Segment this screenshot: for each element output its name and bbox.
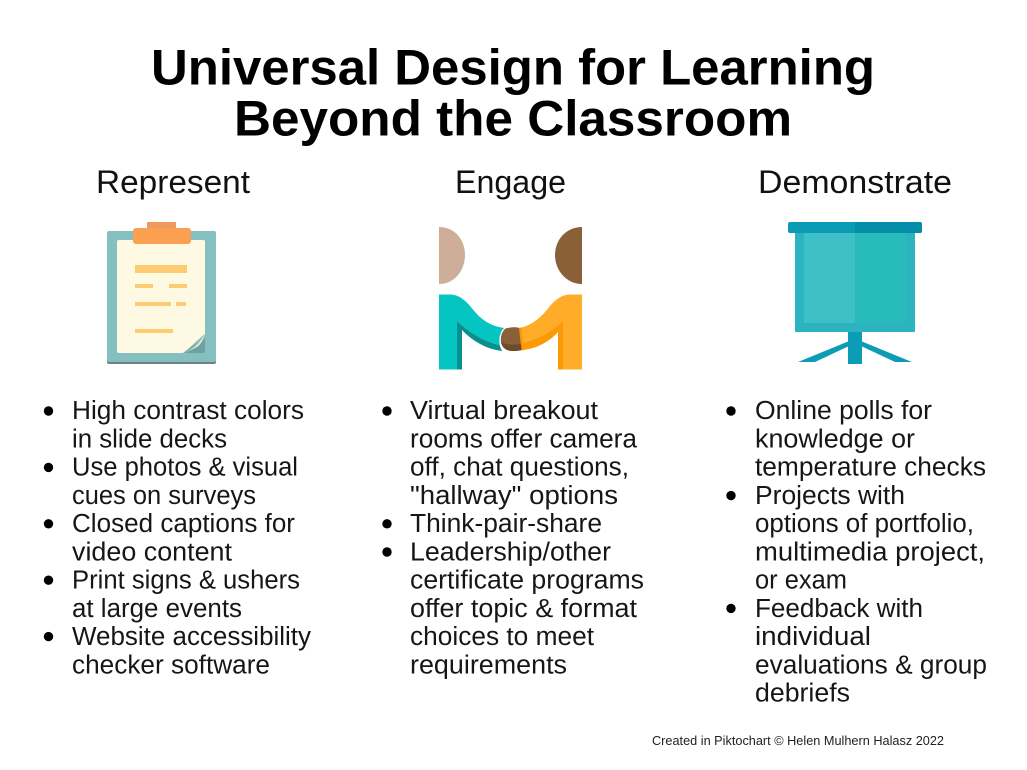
title: Beyond the Classroom xyxy=(234,90,792,146)
list: Demonstrate: knowledge or xyxy=(755,425,916,453)
heading: Engage: Engage xyxy=(455,164,566,200)
list: Represent: in slide decks xyxy=(72,425,227,453)
list: Represent: Website accessibility xyxy=(72,623,311,651)
list: Demonstrate: evaluations & group xyxy=(755,651,987,679)
list: Demonstrate: Online polls for xyxy=(755,397,933,425)
list: Demonstrate: multimedia project, xyxy=(755,538,985,566)
list: Engage: Think-pair-share xyxy=(410,510,602,538)
list: Demonstrate xyxy=(726,397,987,708)
heading: Demonstrate: Demonstrate xyxy=(758,164,952,200)
list: Engage: rooms offer camera xyxy=(410,425,638,453)
list: Demonstrate: options of portfolio, xyxy=(755,510,974,538)
list: Represent: checker software xyxy=(72,651,270,679)
list: Engage: Virtual breakout xyxy=(410,397,598,425)
list: Engage xyxy=(382,397,644,679)
icon: projector screen xyxy=(788,222,922,364)
list: Demonstrate: debriefs xyxy=(755,680,850,708)
list: Represent: cues on surveys xyxy=(72,482,256,510)
list: Demonstrate: temperature checks xyxy=(755,454,986,482)
list: Engage: Leadership/other xyxy=(410,538,612,566)
list: Engage: offer topic & format xyxy=(410,595,637,623)
list: Engage: "hallway" options xyxy=(410,482,618,510)
list: Demonstrate: individual xyxy=(755,623,871,651)
list: Represent: Use photos & visual xyxy=(72,454,298,482)
list: Engage: off, chat questions, xyxy=(410,454,629,482)
list: Represent: High contrast colors xyxy=(72,397,304,425)
list: Demonstrate: Projects with xyxy=(755,482,905,510)
list: Represent: video content xyxy=(72,538,232,566)
list: Represent: Print signs & ushers xyxy=(72,566,300,594)
list: Demonstrate: Feedback with xyxy=(755,595,923,623)
heading: Represent: Represent xyxy=(96,164,250,200)
list: Engage: choices to meet xyxy=(410,623,594,651)
list: Represent: at large events xyxy=(72,595,242,623)
title: Universal Design for Learning xyxy=(151,40,875,96)
list: Engage: certificate programs xyxy=(410,566,644,594)
icon: handshake xyxy=(439,227,582,370)
list: Engage: requirements xyxy=(410,651,567,679)
list: Represent: Closed captions for xyxy=(72,510,296,538)
list: Demonstrate: or exam xyxy=(755,566,847,594)
list: Represent xyxy=(44,397,311,679)
icon: clipboard xyxy=(107,222,216,364)
credit line: Created in Piktochart © Helen Mulhern Halasz 2022 xyxy=(652,734,944,748)
title xyxy=(151,40,875,146)
